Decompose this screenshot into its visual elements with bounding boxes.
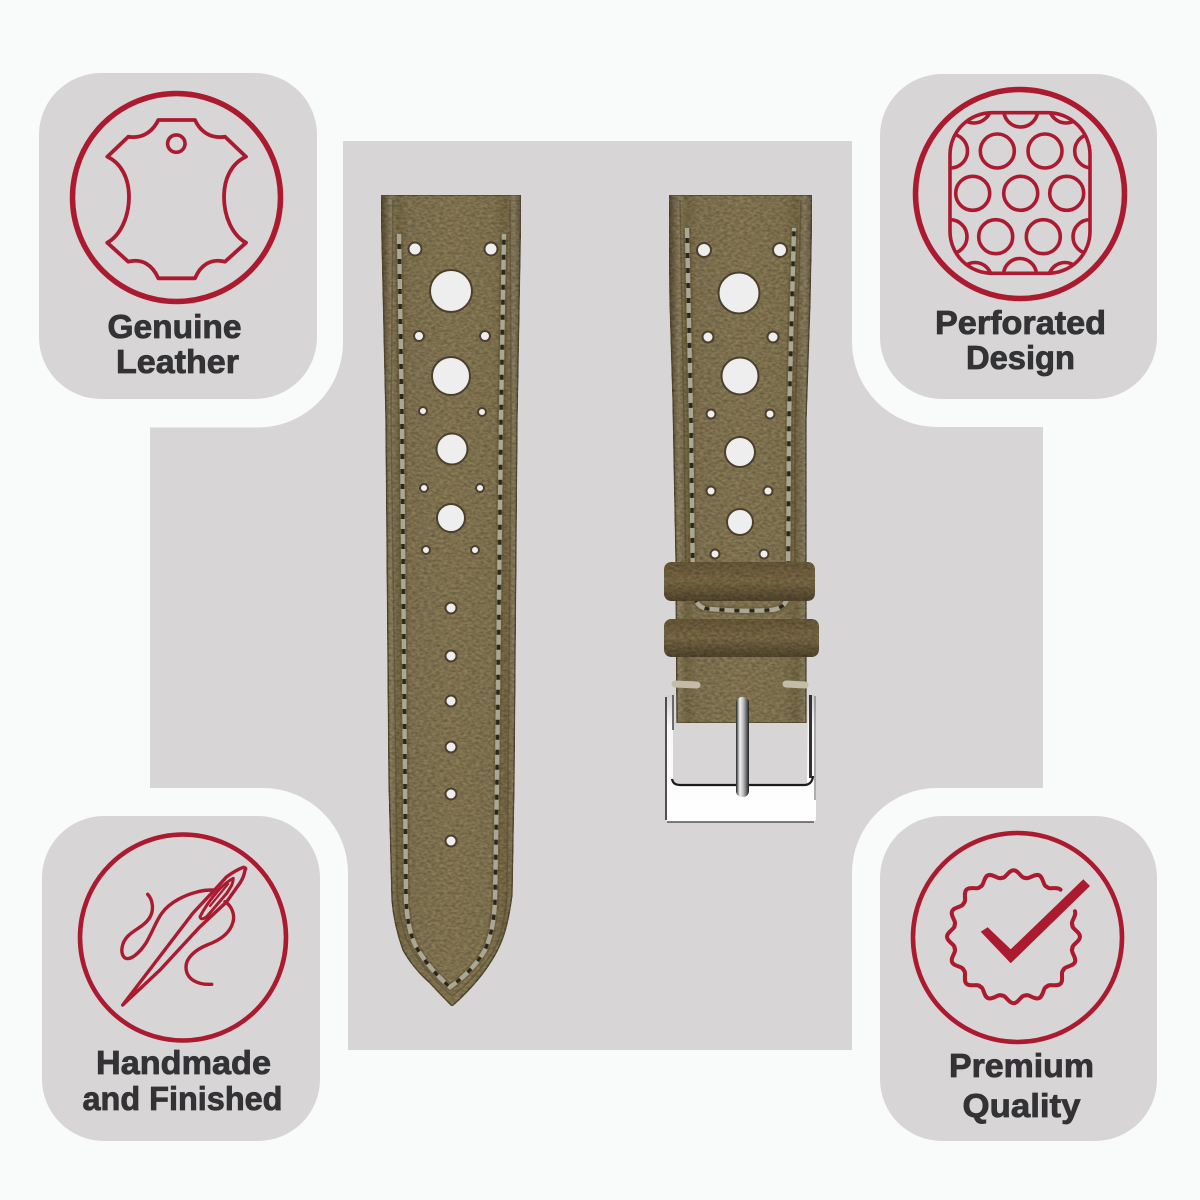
right strap: buckle piece [664, 195, 819, 822]
label: perforated design: Perforated [935, 304, 1106, 341]
label: premium quality: Quality [962, 1087, 1081, 1124]
keeper loop upper [664, 562, 815, 601]
card background [880, 816, 1157, 1141]
label: handmade and finished: and Finished [82, 1080, 282, 1117]
end stitches [675, 684, 805, 685]
strap stitching [399, 234, 504, 987]
card: genuine leather [39, 73, 317, 399]
strap perforations [697, 243, 787, 558]
label: perforated design: Design [966, 339, 1075, 376]
strap perforations [408, 242, 498, 846]
icon: leather hide [72, 94, 280, 302]
card: handmade and finished [42, 816, 320, 1141]
card background [880, 74, 1157, 399]
icon: needle and thread [80, 834, 286, 1040]
label: handmade and finished: Handmade [96, 1044, 271, 1081]
label: premium quality [949, 1047, 1094, 1124]
strap stitching [687, 228, 794, 611]
label: premium quality: Premium [949, 1047, 1094, 1084]
buckle pin [736, 697, 749, 797]
keeper loop lower [664, 619, 819, 657]
strap leather body [381, 195, 521, 1006]
label: handmade and finished [82, 1044, 282, 1117]
strap edge line [391, 200, 511, 996]
card background [42, 816, 320, 1141]
strap edge line [680, 200, 801, 590]
label: perforated design [935, 304, 1106, 376]
buckle frame [665, 695, 816, 822]
icon: quality badge with check [913, 833, 1122, 1042]
card: perforated design [880, 74, 1157, 399]
label: genuine leather: Leather [116, 343, 239, 380]
label: genuine leather [108, 308, 242, 380]
card background [39, 73, 317, 399]
background panel [150, 141, 1043, 1050]
label: genuine leather: Genuine [108, 308, 242, 345]
left strap: long piece [381, 195, 521, 1006]
strap leather body [669, 195, 812, 723]
card: premium quality [880, 816, 1157, 1141]
icon: perforated pattern [916, 89, 1124, 298]
